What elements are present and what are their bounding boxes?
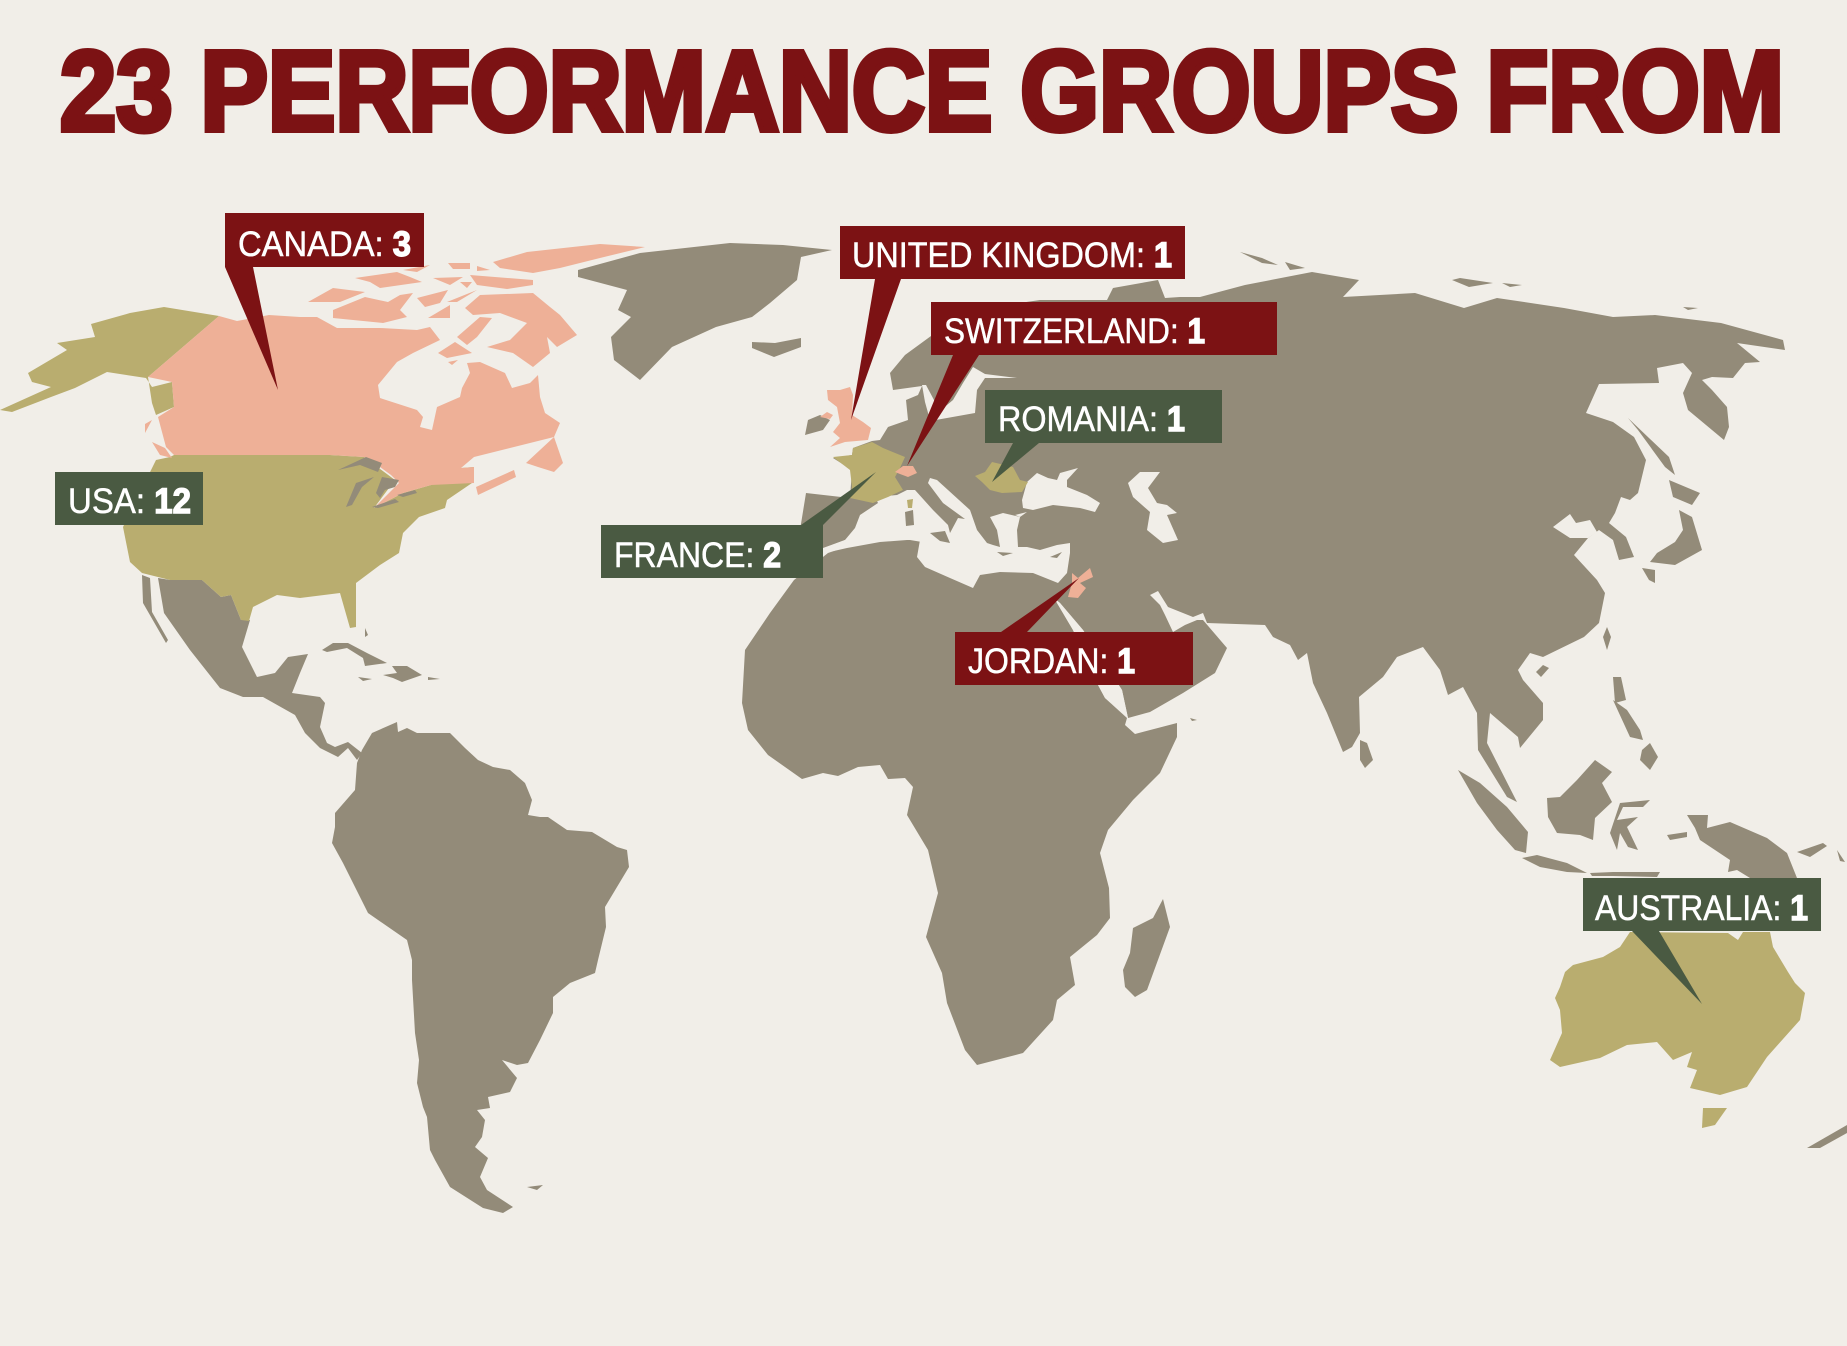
- New Guinea: [1687, 815, 1797, 878]
- Sulawesi: [1610, 800, 1650, 850]
- Taiwan: [1603, 627, 1611, 650]
- Mindanao: [1640, 743, 1658, 770]
- Tasmania: [1702, 1108, 1727, 1128]
- Kyushu: [1642, 568, 1655, 583]
- Axel Heiberg Island: [448, 263, 470, 269]
- Canadian mainland: [148, 315, 560, 508]
- country: Australia: [1550, 932, 1805, 1128]
- Hainan: [1536, 665, 1549, 677]
- landmass: South America: [332, 722, 629, 1213]
- New Britain: [1797, 843, 1827, 857]
- Sri Lanka: [1360, 740, 1373, 768]
- Cyprus: [1050, 552, 1062, 558]
- Southampton Island: [438, 342, 472, 358]
- Somerset Island: [447, 290, 477, 302]
- Coats Island: [448, 360, 458, 365]
- Alaska: [0, 307, 219, 415]
- Prince of Wales Island: [417, 290, 448, 307]
- Honshu: [1650, 510, 1702, 565]
- callout: Canada: [225, 213, 424, 390]
- Corsica: [907, 499, 913, 508]
- Great Britain: [827, 387, 871, 447]
- New Zealand: [1807, 1125, 1847, 1148]
- Visayas: [1613, 700, 1643, 740]
- callout: USA: [55, 472, 203, 525]
- callout: France: [601, 472, 876, 578]
- mainland France: [833, 442, 905, 503]
- Lake Erie: [372, 499, 399, 508]
- Victoria Island: [333, 293, 413, 323]
- label: Canada: CANADA: 3: [238, 225, 411, 264]
- label: USA: USA: 12: [68, 482, 191, 521]
- Melville Island: [355, 272, 422, 288]
- landmass: Madagascar: [1123, 899, 1170, 997]
- landmass: Cuba: [322, 643, 387, 666]
- seas: [824, 367, 1597, 718]
- Sakhalin: [1628, 418, 1675, 475]
- Seram: [1667, 832, 1687, 840]
- Bohai Sea: [1553, 514, 1597, 538]
- callout: Jordan: [955, 578, 1193, 685]
- landmass: Hispaniola: [383, 666, 422, 682]
- Novaya Zemlya: [1240, 252, 1278, 265]
- Kattegat: [922, 385, 935, 420]
- callout: Romania: [985, 390, 1222, 482]
- Nova Scotia: [476, 470, 516, 495]
- landmass: Iceland: [752, 338, 801, 357]
- Arctic island east: [1502, 283, 1522, 287]
- country: Canada: [145, 244, 645, 508]
- country: United Kingdom: [820, 387, 871, 447]
- Prince Patrick Island: [403, 265, 430, 272]
- Wrangel Island: [1683, 307, 1698, 310]
- Melville Peninsula: [457, 317, 492, 345]
- Mediterranean Sea: [824, 478, 1070, 588]
- Baffin Island: [465, 293, 577, 367]
- Black Sea: [1022, 468, 1100, 512]
- Solomon Islands: [1837, 850, 1845, 862]
- landmass: Ireland: [805, 415, 830, 435]
- Northern Ireland: [820, 412, 833, 419]
- landmass: Africa: [742, 535, 1177, 1065]
- label: United Kingdom: UNITED KINGDOM: 1: [852, 236, 1172, 275]
- Boothia Peninsula: [428, 305, 450, 318]
- landmass: Baja California: [142, 575, 168, 643]
- Persian Gulf: [1150, 591, 1203, 632]
- callout: Switzerland: [907, 302, 1277, 466]
- Great Lakes: [338, 457, 417, 508]
- country: Jordan: [1068, 568, 1093, 598]
- Devon Island: [470, 275, 533, 289]
- label: Switzerland: SWITZERLAND: 1: [944, 312, 1205, 351]
- Borneo: [1547, 760, 1612, 840]
- Java: [1522, 855, 1587, 873]
- Lesser Sunda Islands: [1590, 872, 1660, 877]
- Lake Superior: [338, 457, 382, 472]
- Sicily: [930, 531, 950, 543]
- Red Sea: [1053, 597, 1128, 718]
- landmass: Mexico and Central America: [158, 578, 362, 760]
- Lake Huron: [376, 477, 399, 498]
- landmass: Eurasia: [800, 272, 1785, 802]
- Cornwallis Island: [460, 282, 472, 288]
- Sumatra: [1458, 770, 1528, 853]
- Hokkaido: [1669, 480, 1700, 505]
- Banks Island: [308, 288, 365, 302]
- country: Switzerland: [895, 466, 917, 477]
- New Siberian Islands: [1452, 278, 1493, 287]
- Lake Ontario: [397, 490, 417, 497]
- country: France: [833, 442, 913, 508]
- landmass: Jamaica: [358, 677, 372, 681]
- Amund Ringnes Island: [477, 266, 490, 271]
- Haida Gwaii: [145, 420, 152, 433]
- Bathurst Island: [433, 277, 463, 285]
- label: Australia: AUSTRALIA: 1: [1595, 889, 1808, 928]
- callout: Australia: [1583, 878, 1821, 1004]
- Lake Michigan: [346, 477, 374, 507]
- Baltic Sea: [930, 367, 1017, 421]
- landmass: Bahamas: [365, 628, 368, 637]
- Arctic island: [1285, 262, 1305, 270]
- Socotra: [1190, 718, 1197, 721]
- Ellesmere Island: [493, 244, 645, 273]
- world map: other countries: [142, 243, 1785, 1213]
- landmass: Greenland: [578, 243, 832, 380]
- Crete: [997, 552, 1013, 556]
- callout: United Kingdom: [840, 226, 1185, 420]
- contiguous United States: [123, 455, 474, 628]
- label: Romania: ROMANIA: 1: [998, 400, 1185, 439]
- Luzon: [1613, 677, 1626, 703]
- label: Jordan: JORDAN: 1: [968, 642, 1135, 681]
- landmass: Falkland Islands: [527, 1185, 543, 1190]
- Australian mainland: [1550, 932, 1805, 1095]
- Sea of Marmara: [1015, 512, 1027, 517]
- Sardinia: [905, 510, 914, 526]
- Caspian Sea: [1128, 472, 1178, 543]
- country: USA: [0, 307, 474, 628]
- landmass: Puerto Rico: [428, 677, 440, 680]
- Newfoundland: [526, 437, 563, 472]
- islands of Europe and Asia-Pacific: [905, 252, 1847, 1148]
- Vancouver Island: [152, 442, 172, 458]
- label: France: FRANCE: 2: [614, 536, 781, 575]
- country: Romania: [975, 462, 1028, 493]
